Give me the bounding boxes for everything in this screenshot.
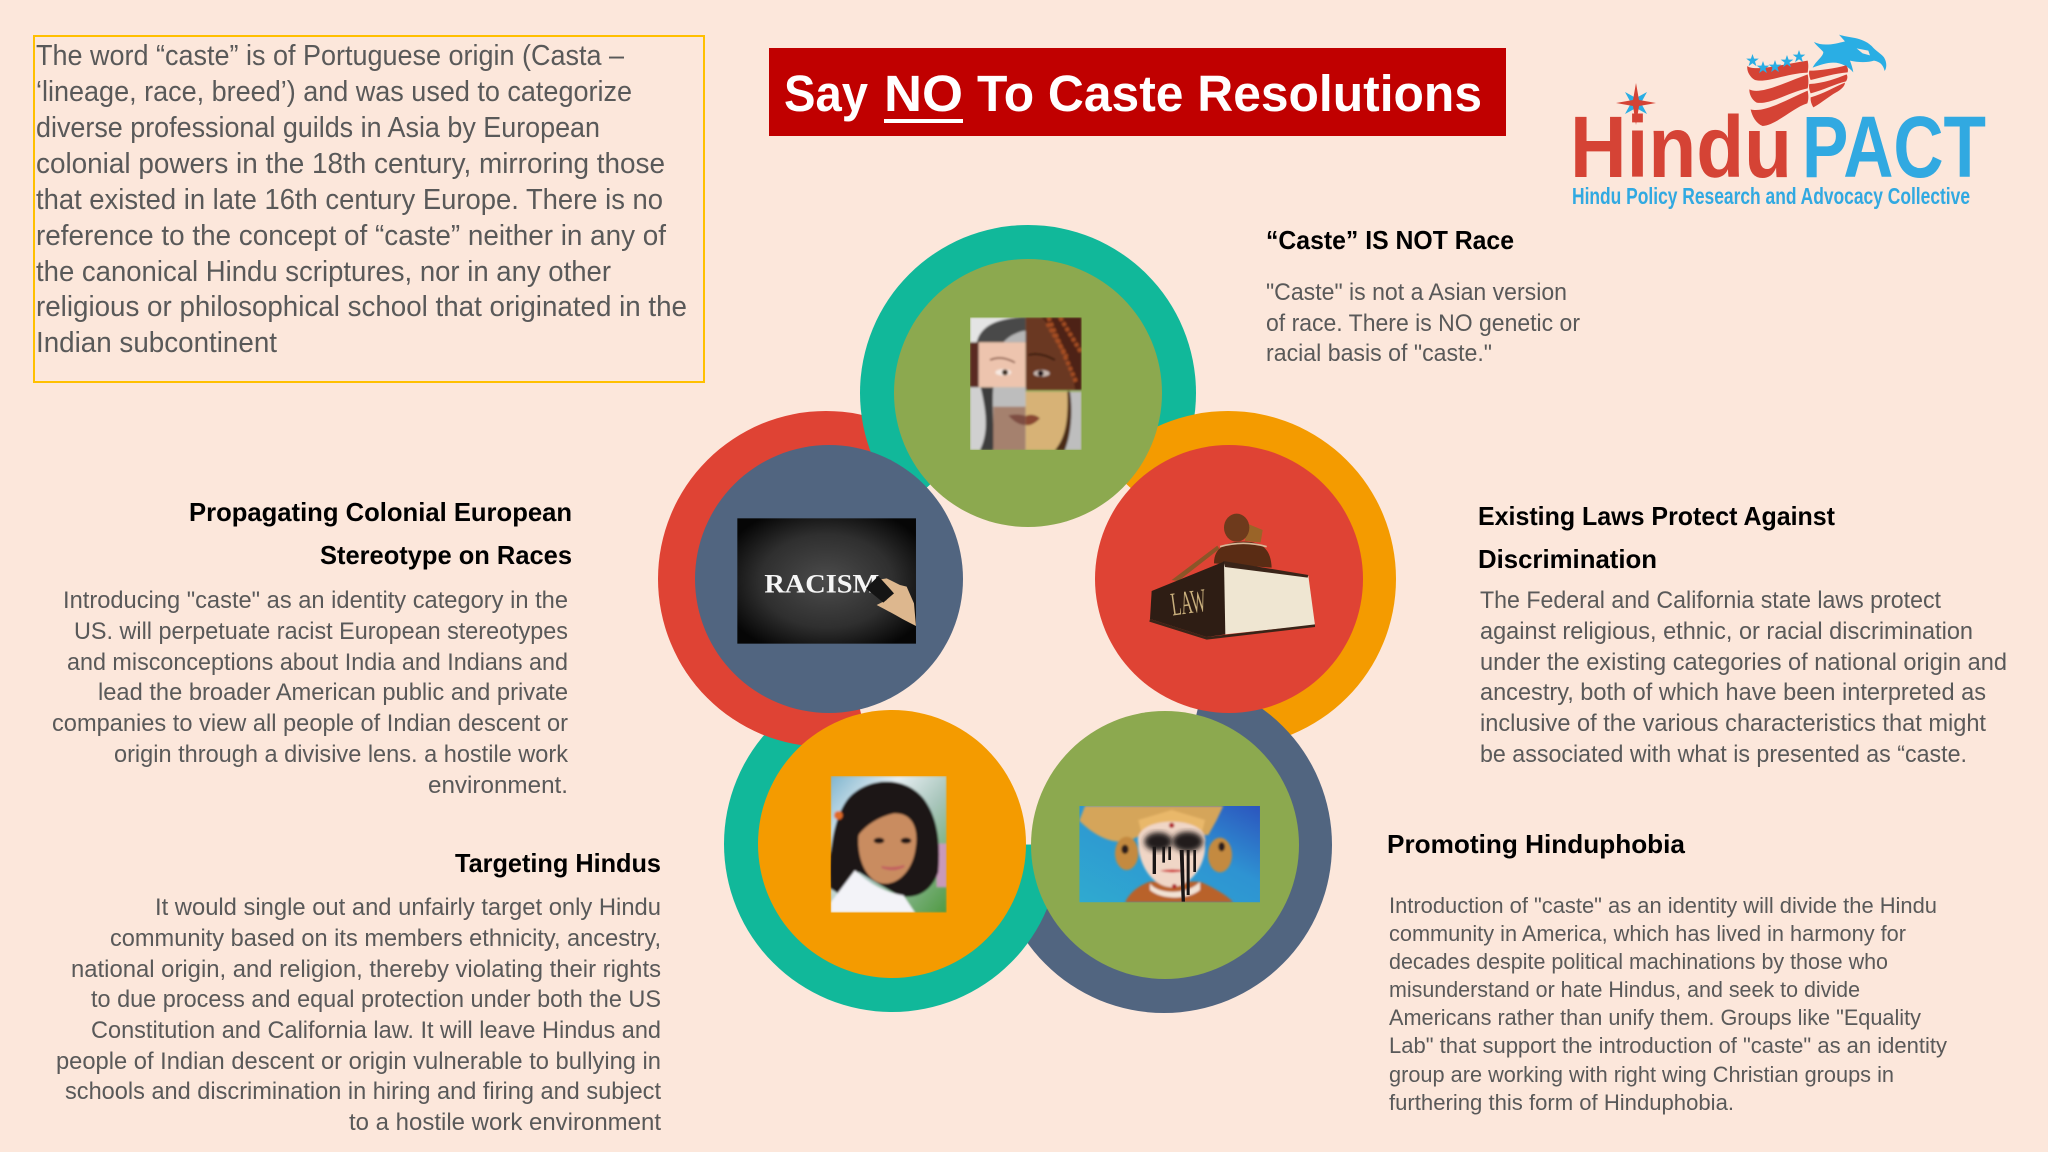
heading: “Caste” IS NOT Race	[1266, 225, 1514, 255]
logo: HinduPACT	[1570, 35, 1986, 209]
body text: environment.	[428, 772, 568, 799]
body text: It would single out and unfairly target only Hindu	[155, 894, 661, 921]
panel: etymology text box: the canonical Hindu scriptures, nor in any other	[36, 256, 611, 288]
body text: Lab" that support the introduction of "caste" as an identity	[1389, 1033, 1948, 1058]
body text	[1266, 279, 1580, 367]
body text: companies to view all people of Indian descent or	[52, 710, 568, 737]
panel: etymology text box: diverse professional guilds in Asia by European	[36, 112, 600, 144]
icon: compass star	[1616, 83, 1656, 125]
panel: etymology text box: ‘lineage, race, breed’) and was used to categorize	[36, 76, 632, 108]
heading: Stereotype on Races	[320, 540, 572, 570]
panel: targeting hindus	[56, 848, 661, 1136]
body text: schools and discrimination in hiring and firing and subject	[65, 1078, 661, 1105]
body text: to a hostile work environment	[349, 1109, 661, 1136]
image: defaced deity on blue background	[1079, 806, 1260, 902]
body text: Constitution and California law. It will leave Hindus and	[91, 1017, 661, 1044]
image: racism chalkboard	[737, 518, 916, 644]
body text: group are working with right wing Christian groups in	[1389, 1062, 1894, 1087]
heading: Existing Laws Protect Against	[1478, 501, 1835, 531]
title banner: Say	[784, 65, 869, 122]
image: racism chalkboard: RACISM	[764, 569, 879, 599]
body text: furthering this form of Hinduphobia.	[1389, 1090, 1734, 1115]
panel: etymology text box: Indian subcontinent	[36, 327, 277, 359]
panel: etymology text box: religious or philosophical school that originated in the	[36, 291, 687, 323]
image: law book and gavel: LAW	[1169, 582, 1209, 624]
panel: caste is not race	[1266, 225, 1580, 367]
body text: to due process and equal protection under both the US	[91, 986, 661, 1013]
title banner: To Caste Resolutions	[977, 65, 1482, 122]
inner circle: orange, bottom left	[758, 710, 1026, 978]
body text: "Caste" is not a Asian version	[1266, 279, 1567, 306]
panel: promoting hinduphobia	[1387, 829, 1948, 1115]
body text	[1480, 587, 2007, 768]
body text: people of Indian descent or origin vulnerable to bullying in	[56, 1048, 661, 1075]
panel: etymology text box: The word “caste” is of Portuguese origin (Casta –	[36, 40, 624, 72]
heading: Propagating Colonial European	[189, 497, 572, 527]
body text: ancestry, both of which have been interpreted as	[1480, 679, 1986, 706]
body text: Introducing "caste" as an identity category in the	[63, 587, 568, 614]
body text: US. will perpetuate racist European stereotypes	[74, 618, 568, 645]
logo: HinduPACT: Hindu	[1570, 99, 1792, 196]
body text: racial basis of "caste."	[1266, 340, 1492, 367]
body text: lead the broader American public and private	[98, 679, 568, 706]
outer ring: red lower part overlapping teal	[678, 660, 861, 746]
icon: flag stripes	[1747, 61, 1848, 126]
body text	[56, 894, 661, 1136]
panel: etymology text box: reference to the concept of “caste” neither in any of	[36, 220, 666, 252]
inner circle: slate, left	[695, 445, 963, 713]
body text	[52, 587, 569, 799]
panel: existing laws	[1478, 501, 2007, 768]
image: young girl portrait	[830, 776, 947, 913]
body text	[1389, 893, 1948, 1115]
heading: Discrimination	[1478, 544, 1657, 574]
body text: of race. There is NO genetic or	[1266, 310, 1580, 337]
icon: stars	[1746, 50, 1805, 73]
heading: Targeting Hindus	[455, 848, 661, 878]
body text: misunderstand or hate Hindus, and seek to divide	[1389, 977, 1860, 1002]
panel: colonial european stereotype	[52, 497, 572, 799]
title banner	[769, 48, 1506, 136]
inner circle: red, right	[1095, 445, 1363, 713]
image: law book and gavel	[1149, 514, 1315, 640]
icon: eagle head	[1813, 35, 1886, 72]
image: four-quadrant composite face	[970, 317, 1082, 450]
heading	[189, 497, 572, 570]
inner circle: olive, bottom right	[1031, 711, 1299, 979]
hand and eraser	[866, 576, 916, 626]
heading	[1478, 501, 1835, 574]
body text: be associated with what is presented as “caste.	[1480, 741, 1967, 768]
cycle diagram of five circles	[658, 225, 1396, 1013]
body text: against religious, ethnic, or racial discrimination	[1480, 618, 1973, 645]
heading: Promoting Hinduphobia	[1387, 829, 1686, 859]
outer ring: slate, bottom right	[996, 677, 1332, 1013]
body text: Americans rather than unify them. Groups like "Equality	[1389, 1005, 1922, 1030]
title banner: NO	[884, 65, 963, 122]
body text: origin through a divisive lens. a hostile work	[114, 741, 569, 768]
panel: etymology text box	[34, 36, 704, 382]
central background pentagon	[829, 393, 1229, 845]
body text: community based on its members ethnicity, ancestry,	[110, 925, 661, 952]
outer ring: teal, top	[860, 225, 1196, 561]
body text: Introduction of "caste" as an identity will divide the Hindu	[1389, 893, 1937, 918]
body text: under the existing categories of national origin and	[1480, 649, 2007, 676]
panel: etymology text box: colonial powers in the 18th century, mirroring those	[36, 148, 665, 180]
outer ring: orange, right	[1060, 411, 1396, 747]
body text: and misconceptions about India and Indians and	[67, 649, 568, 676]
inner circle: olive, top	[894, 259, 1162, 527]
outer ring: red, left	[658, 411, 994, 747]
body text: decades despite political machinations by those who	[1389, 949, 1888, 974]
body text: community in America, which has lived in harmony for	[1389, 921, 1906, 946]
logo: HinduPACT: PACT	[1802, 99, 1986, 196]
body text: The Federal and California state laws protect	[1480, 587, 1941, 614]
body text: national origin, and religion, thereby violating their rights	[71, 956, 661, 983]
panel: etymology text box: that existed in late 16th century Europe. There is no	[36, 184, 663, 216]
outer ring: teal, bottom left	[724, 676, 1060, 1012]
body text: inclusive of the various characteristics that might	[1480, 710, 1986, 737]
